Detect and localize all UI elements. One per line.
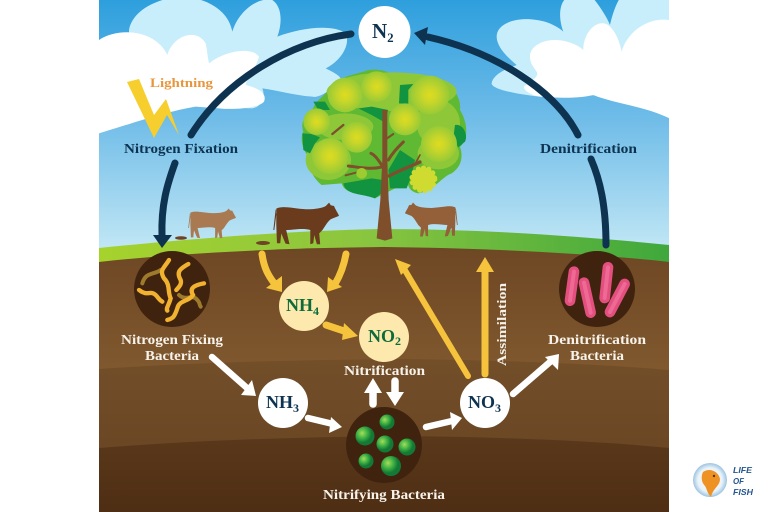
arrow: nitrogen fixation to bacteria [153,163,175,248]
node: NH3: NH [266,392,293,412]
icon: denitrification bacteria [559,251,635,327]
cloud: left [99,0,347,133]
logo text: LIFE [733,465,752,475]
node: N2 [358,6,410,58]
tree dark patches [302,84,466,198]
node: NO2: NO [368,326,395,346]
tree trunk and branches [332,110,420,241]
label: Lightning: Lightning [150,75,214,90]
tree foliage silhouette [302,70,466,198]
tree light green mass [306,72,460,180]
cow: right [405,203,458,237]
label: Denitrification Bacteria: Denitrification [548,332,647,347]
node: NH4: NH [286,295,313,315]
arrow: NO3 to denitrification bacteria [513,354,559,394]
arrow: soil to NH4 left [262,254,282,292]
label: Nitrogen Fixation: Nitrogen Fixation [124,141,239,156]
logo fishbowl [693,463,727,497]
label: Nitrification: Nitrification [344,363,426,378]
node: NO2 [359,312,409,362]
arrow: bacteria up to nitrification [364,378,382,404]
arrow: nitrification down to bacteria [386,381,404,406]
arrow: NH4 to NO2 [326,323,358,340]
grass [99,229,669,262]
soil layers [99,247,669,512]
tree [302,70,466,241]
sky [99,0,669,262]
arrow: assimilation [476,257,494,374]
arrow: NH3 to nitrifying bacteria [308,417,342,433]
label: Denitrification Bacteria [548,332,647,363]
logo text: FISH [733,487,754,497]
icon: nitrifying bacteria [346,407,422,483]
node: NH4: 4 [313,304,319,318]
arrow: soil to NH4 right [327,254,346,292]
label: Denitrification top: Denitrification [540,141,638,156]
arrow: bacteria to NO3 [426,412,462,430]
label: Nitrogen Fixing Bacteria: Bacteria [145,348,199,363]
node: NO3 [460,378,510,428]
cow: dark centre [273,203,339,244]
label: Denitrification Bacteria: Bacteria [570,348,624,363]
background panel [99,0,669,512]
label: Assimilation: Assimilation [494,282,509,366]
cloud: right [492,0,669,118]
arrow: bacteria to NH3 [212,357,256,396]
label: Nitrogen Fixing Bacteria: Nitrogen Fixing [121,332,223,347]
node: NO2: 2 [395,334,401,348]
label: Nitrifying Bacteria: Nitrifying Bacteria [323,487,445,502]
icon: nitrogen fixing bacteria [134,251,210,327]
logo text: OF [733,476,745,486]
label: Nitrogen Fixing Bacteria [121,332,223,363]
node: NO3: NO [468,392,495,412]
arrow: denitrification to N2 [414,27,578,135]
node: NH4 [279,281,329,331]
node: NO3: 3 [495,401,501,415]
node: N2: N [372,19,387,43]
node: NH3: 3 [293,401,299,415]
dung piles [175,236,270,245]
arrow: NO3 to plants [395,259,468,376]
logo text [733,465,754,497]
node: N2: 2 [387,30,394,45]
logo: Life of Fish [693,463,754,497]
cow: light left [188,208,236,238]
arrow: N2 to nitrogen fixation [191,34,351,135]
node: NH3 [258,378,308,428]
tree yellow leaf clusters [303,71,457,191]
arrow: denitrification bacteria upward [591,159,606,245]
icon: lightning bolt [127,79,179,138]
